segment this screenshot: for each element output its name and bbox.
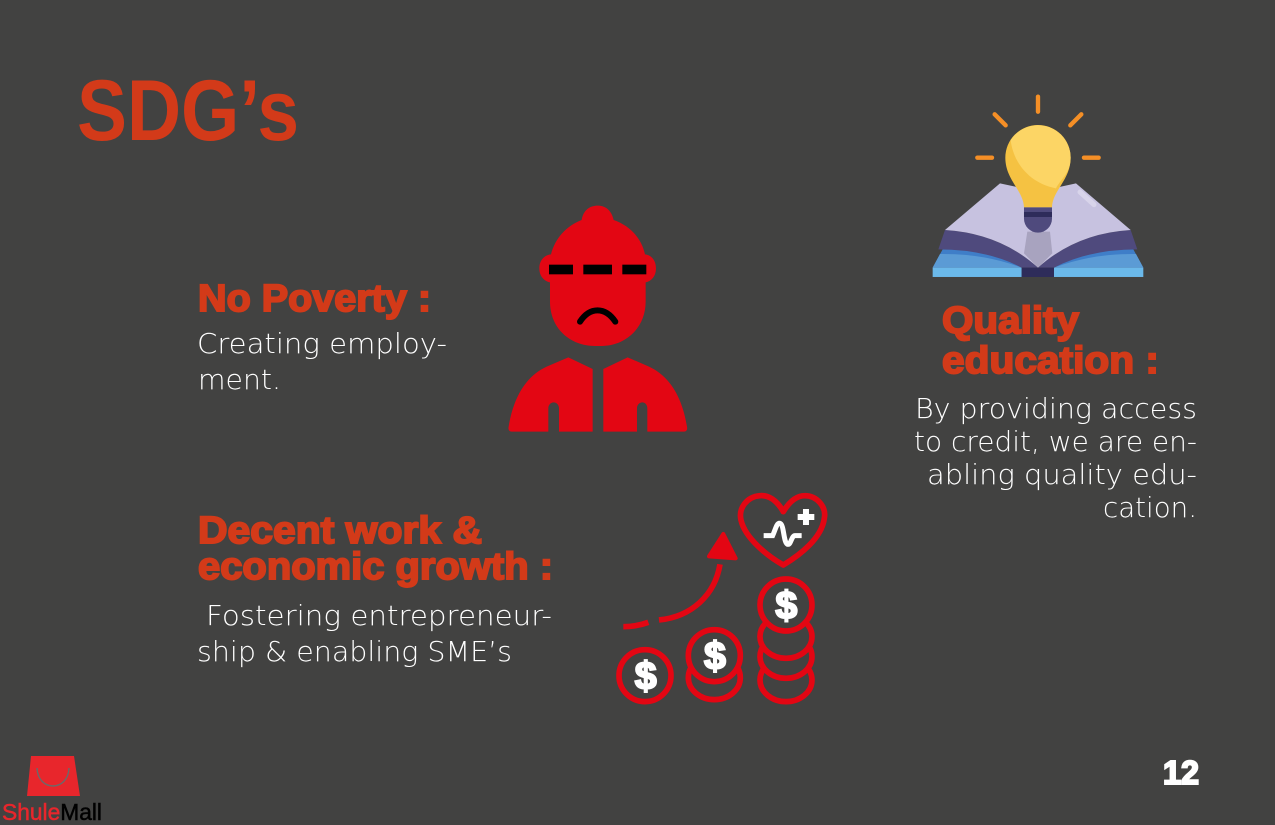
panel: decent work and economic growth (197, 496, 825, 702)
text block: quality education: By providing access (915, 392, 1197, 425)
icon: coins growth and heart: $ (635, 654, 657, 698)
panel: no poverty (197, 206, 687, 432)
heading: decent work: economic growth : (198, 546, 553, 588)
text block: no poverty (197, 327, 447, 396)
icon: book and light bulb (933, 97, 1143, 277)
icon: coins growth and heart: $ (704, 634, 726, 678)
logo: ShuleMall (2, 756, 102, 825)
text block: decent work: Fostering entrepreneur- (206, 599, 552, 632)
icon: coins growth and heart: $ (775, 583, 797, 627)
text block: decent work (197, 599, 552, 668)
icon: coins growth and heart (619, 496, 825, 702)
panel: quality education (914, 97, 1197, 524)
heading: decent work (198, 510, 553, 588)
icon: sad man (508, 206, 687, 432)
icon: shopping bag (27, 756, 80, 796)
text block: quality education: cation. (1103, 491, 1197, 524)
heading: quality education: Quality (942, 300, 1079, 342)
title: SDG’s (77, 63, 299, 159)
text block: decent work: ship & enabling SME’s (197, 635, 512, 668)
text block: no poverty: Creating employ- (197, 327, 447, 360)
text block: quality education: abling quality edu- (927, 458, 1197, 491)
logo wordmark: ShuleMall (2, 799, 102, 825)
text block: quality education (914, 392, 1197, 524)
heading: decent work: Decent work & (198, 510, 482, 552)
heading: quality education (942, 300, 1159, 382)
page number: 12 (1163, 754, 1199, 791)
heading: quality education: education : (942, 340, 1159, 382)
text block: quality education: to credit, we are en- (914, 425, 1197, 458)
heading: no poverty: No Poverty : (198, 278, 431, 320)
text block: no poverty: ment. (198, 363, 281, 396)
